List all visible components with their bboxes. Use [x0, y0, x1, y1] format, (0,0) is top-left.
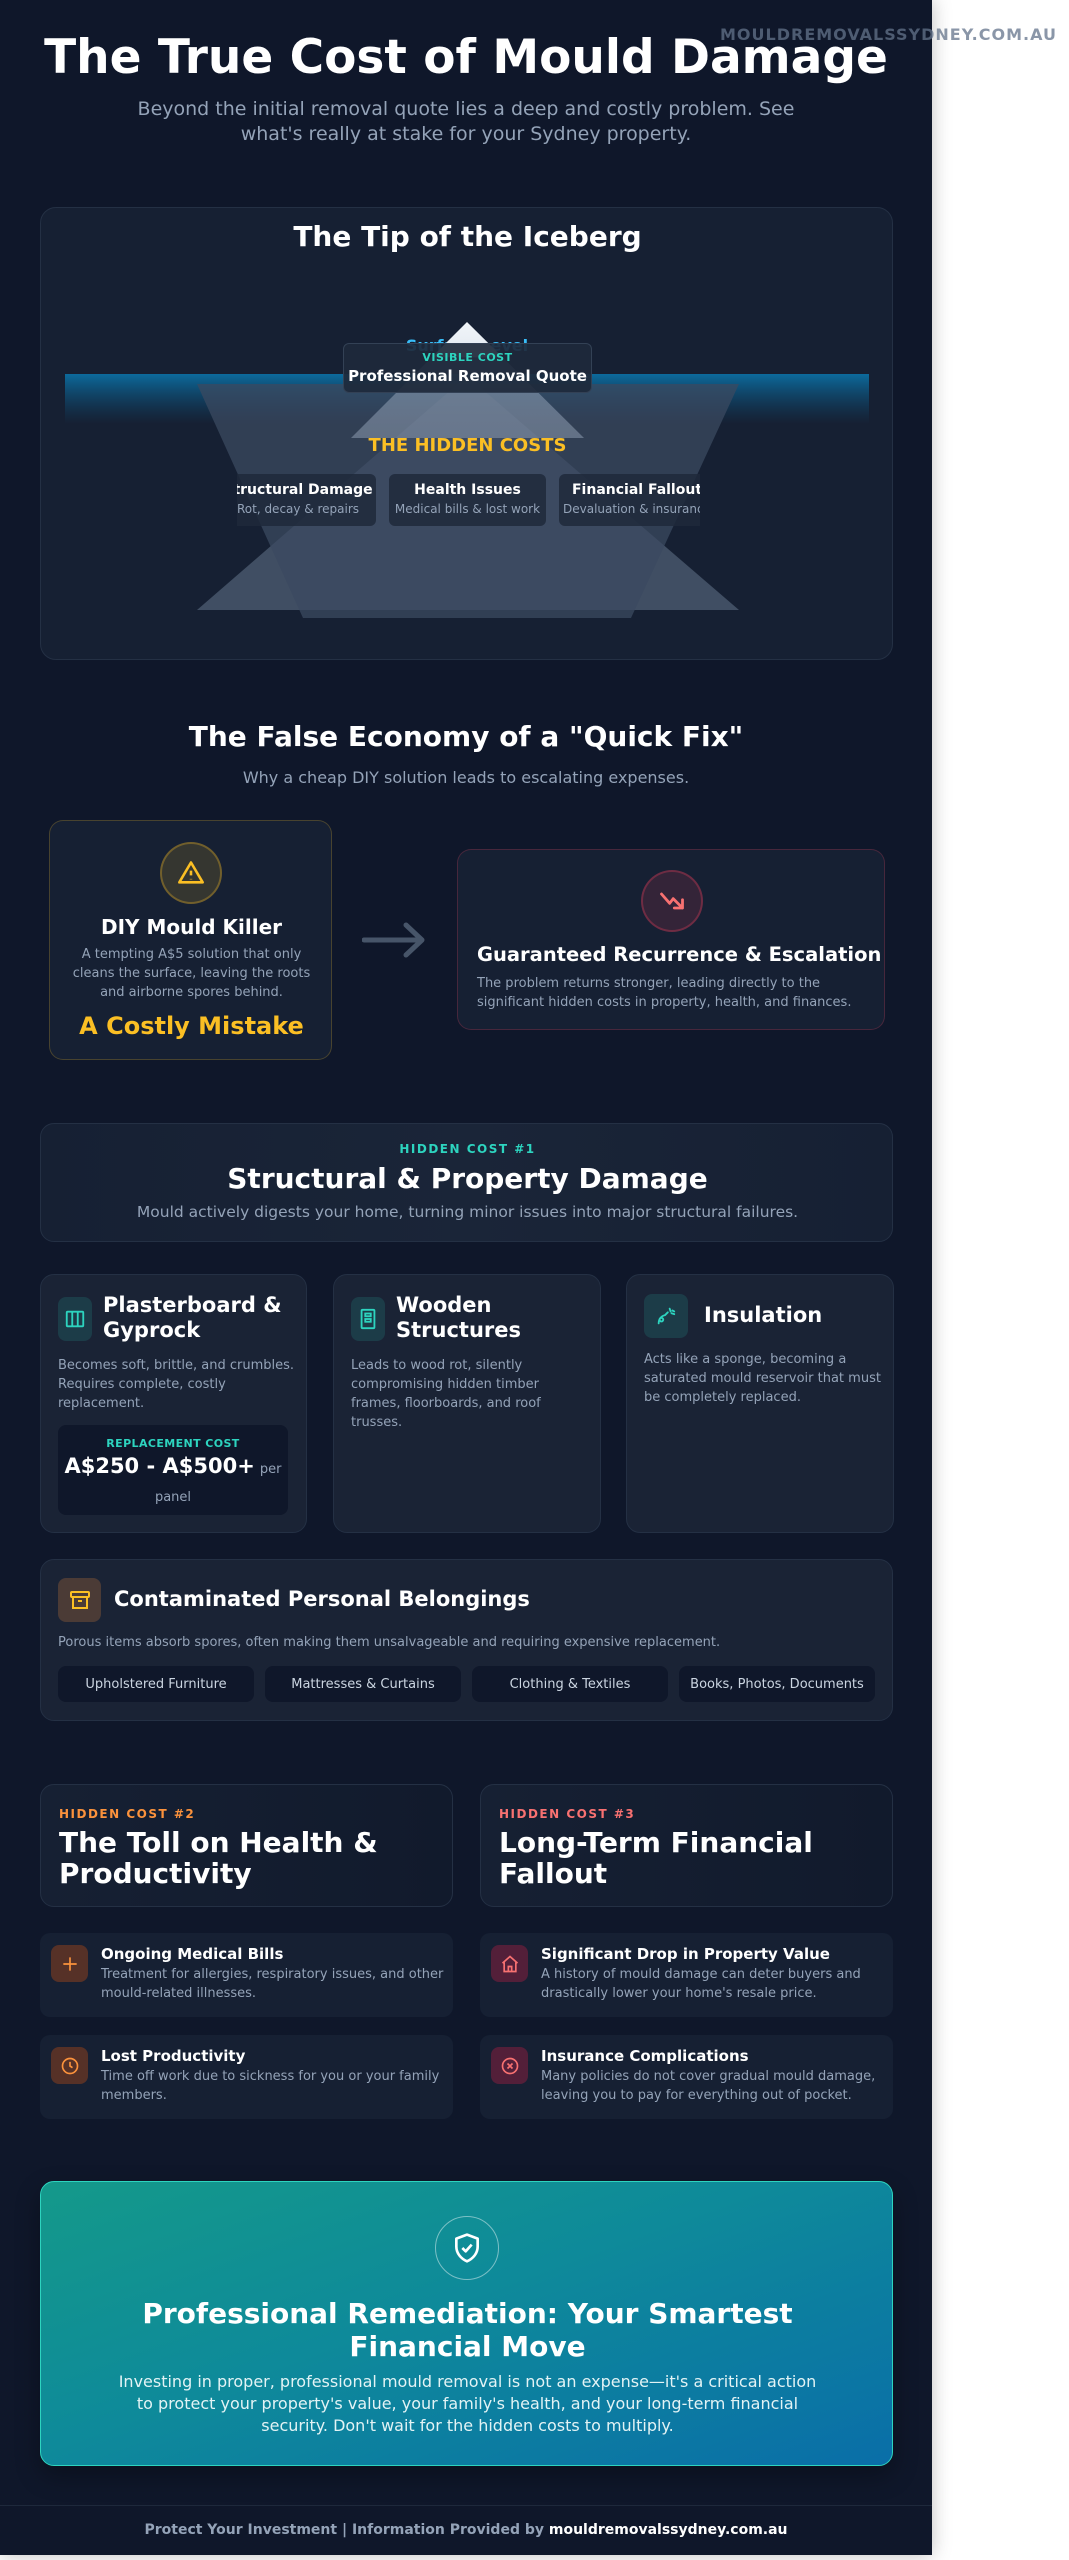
card: insulation: Insulation	[704, 1303, 822, 1327]
panel: call to action	[40, 2181, 893, 2466]
panel: DIY mould killer: A tempting A$5 solution that only cleans the surface, leaving the roots and airborne spores behind.	[73, 947, 310, 1000]
icon: panels	[58, 1297, 92, 1341]
label: visible cost: Professional Removal Quote	[348, 367, 587, 385]
label: hidden costs: THE HIDDEN COSTS	[369, 435, 566, 456]
item: property value: Significant Drop in Property Value	[541, 1945, 830, 1963]
heading: tip of the iceberg: The Tip of the Iceberg	[293, 220, 642, 253]
card: wooden structures: Structures	[396, 1318, 521, 1342]
item: medical bills: Ongoing Medical Bills	[101, 1945, 283, 1963]
icon: shield check	[435, 2216, 499, 2280]
item: lost productivity: Time off work due to sickness for you or your family members.	[101, 2069, 439, 2103]
tags: belongings	[58, 1666, 875, 1702]
icon: door	[351, 1297, 385, 1341]
item: property value	[480, 1933, 893, 2017]
panel: hidden cost 2 header: The Toll on Health &	[59, 1826, 378, 1859]
watermark: MOULDREMOVALSSYDNEY.COM.AU	[720, 25, 1057, 44]
card: wooden structures	[333, 1274, 601, 1533]
item: lost productivity	[40, 2035, 453, 2119]
item: insurance: Many policies do not cover gradual mould damage, leaving you to pay for everything out of pocket.	[541, 2069, 875, 2103]
tags: belongings: Mattresses & Curtains	[291, 1676, 435, 1692]
label: visible cost	[343, 343, 592, 393]
hidden cost boxes: Medical bills & lost work	[395, 502, 540, 516]
icon: warning	[160, 842, 222, 904]
panel: hidden cost 2 header: Productivity	[59, 1857, 252, 1890]
panel: call to action: Investing in proper, professional mould removal is not an expense—it's a critical action to protect your property's value, your family's health, and your long-term financial security. Don't wait for the hidden costs to multiply.	[119, 2372, 816, 2435]
tags: belongings: Books, Photos, Documents	[690, 1676, 864, 1692]
panel: hidden cost 2 header: HIDDEN COST #2	[59, 1807, 195, 1821]
tags: belongings: Upholstered Furniture	[85, 1676, 227, 1692]
iceberg diagram: Surface Level	[406, 336, 528, 355]
card: plasterboard	[40, 1274, 307, 1533]
card: plasterboard: Gyprock	[103, 1318, 200, 1342]
card: plasterboard: Plasterboard &	[103, 1293, 282, 1317]
panel: recurrence: Guaranteed Recurrence & Escalation	[477, 943, 881, 966]
panel: hidden cost 1 header: Structural & Property Damage	[227, 1162, 708, 1195]
card: wooden structures: Wooden	[396, 1293, 492, 1317]
panel: recurrence	[457, 849, 885, 1030]
item: insurance: Insurance Complications	[541, 2047, 749, 2065]
hidden cost boxes: Rot, decay & repairs	[237, 502, 359, 516]
heading: false economy: The False Economy of a "Quick Fix"	[189, 720, 743, 753]
panel: hidden cost 3 header: Fallout	[499, 1857, 607, 1890]
card: wooden structures: Leads to wood rot, silently compromising hidden timber frames, floorboards, and roof trusses.	[351, 1358, 541, 1430]
panel: hidden cost 3 header: HIDDEN COST #3	[499, 1807, 635, 1821]
panel: DIY mould killer: DIY Mould Killer	[101, 915, 282, 939]
panel: DIY mould killer	[49, 820, 332, 1060]
subtitle: Beyond the initial removal quote lies a deep and costly problem. See what's really at stake for your Sydney property.	[138, 98, 794, 145]
panel: recurrence: The problem returns stronger, leading directly to the significant hidden costs in property, health, and finances.	[477, 976, 851, 1010]
hidden cost boxes: Health Issues	[414, 482, 521, 498]
panel: hidden cost 3 header: Long-Term Financial	[499, 1826, 813, 1859]
panel: iceberg	[40, 207, 893, 660]
panel: hidden cost 3 header	[480, 1784, 893, 1907]
panel: hidden cost 1 header: HIDDEN COST #1	[399, 1142, 536, 1156]
item: insurance	[480, 2035, 893, 2119]
hidden cost boxes: Financial Fallout	[572, 482, 700, 498]
iceberg diagram	[65, 322, 869, 618]
title: The True Cost of Mould Damage	[44, 30, 888, 85]
hidden cost boxes	[237, 474, 700, 526]
item: lost productivity: Lost Productivity	[101, 2047, 245, 2065]
icon: spray	[644, 1294, 688, 1338]
footer: Protect Your Investment | Information Provided by mouldremovalssydney.com.au	[144, 2522, 788, 2538]
icon: trending down	[641, 870, 703, 932]
panel: hidden cost 1 header: Mould actively digests your home, turning minor issues into major structural failures.	[137, 1203, 798, 1221]
tags: belongings: Clothing & Textiles	[510, 1676, 630, 1692]
card: plasterboard: Becomes soft, brittle, and crumbles. Requires complete, costly replacement.	[58, 1358, 294, 1411]
panel: contaminated belongings: Contaminated Personal Belongings	[114, 1587, 530, 1611]
panel: call to action: Professional Remediation: Your Smartest Financial Move	[142, 2297, 793, 2363]
callout: replacement cost: A$250 - A$500+ per panel	[64, 1454, 282, 1505]
panel: hidden cost 2 header	[40, 1784, 453, 1907]
footer	[0, 2505, 932, 2555]
panel: hidden cost 1 header	[40, 1123, 893, 1242]
icon: archive box	[58, 1578, 101, 1622]
panel: contaminated belongings	[40, 1559, 893, 1721]
panel: DIY mould killer: A Costly Mistake	[79, 1012, 304, 1040]
item: property value: A history of mould damage can deter buyers and drastically lower your home's resale price.	[541, 1967, 861, 2001]
panel: contaminated belongings: Porous items absorb spores, often making them unsalvageable and requiring expensive replacement.	[58, 1635, 720, 1650]
card: insulation	[626, 1274, 894, 1533]
card: insulation: Acts like a sponge, becoming a saturated mould reservoir that must be completely replaced.	[644, 1352, 881, 1405]
item: medical bills: Treatment for allergies, respiratory issues, and other mould-related illnesses.	[101, 1967, 443, 2001]
callout: replacement cost: REPLACEMENT COST	[106, 1437, 240, 1450]
item: medical bills	[40, 1933, 453, 2017]
label: visible cost: VISIBLE COST	[422, 351, 513, 364]
callout: replacement cost	[58, 1425, 288, 1515]
subtitle: false economy: Why a cheap DIY solution leads to escalating expenses.	[243, 768, 689, 787]
arrow	[362, 922, 424, 958]
